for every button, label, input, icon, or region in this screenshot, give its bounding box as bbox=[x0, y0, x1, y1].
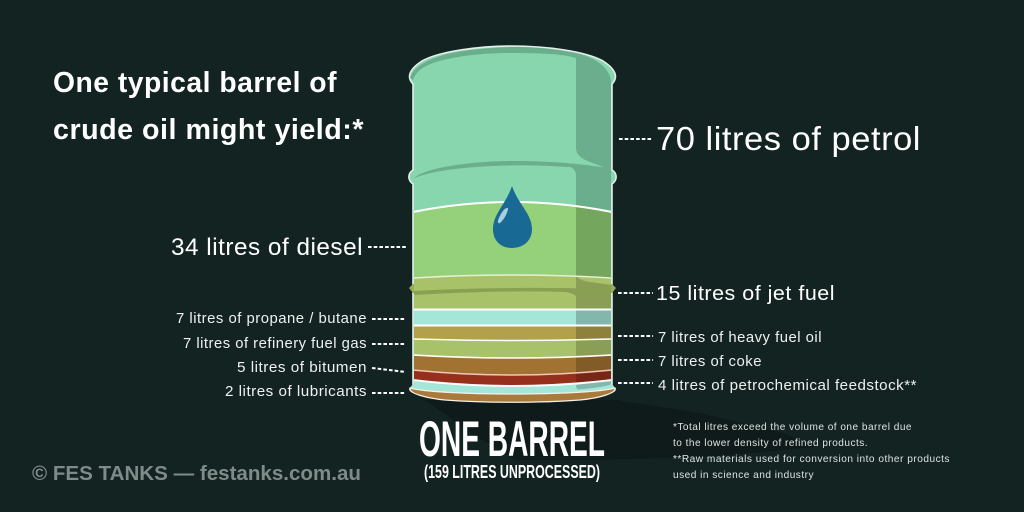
subheading: litres unprocessed: (159 LITRES UNPROCESSED) bbox=[424, 462, 600, 482]
barrel shell bbox=[409, 46, 616, 385]
layer: heavy fuel oil bbox=[413, 324, 612, 341]
title bbox=[53, 67, 364, 146]
layer: propane bbox=[413, 308, 612, 325]
label: diesel: 34 litres of diesel bbox=[171, 234, 363, 261]
icon: oil drop bbox=[493, 186, 532, 248]
footnotes: used in science and industry bbox=[673, 469, 814, 481]
label: lubricants: 2 litres of lubricants bbox=[225, 383, 367, 400]
layer: refinery fuel gas bbox=[413, 339, 612, 358]
layer: jet fuel bbox=[409, 275, 616, 310]
layer: coke bbox=[414, 354, 611, 374]
label: bitumen: 5 litres of bitumen bbox=[237, 359, 367, 376]
layer: lubricants bbox=[413, 380, 612, 392]
label: propane / butane: 7 litres of propane / butane bbox=[176, 310, 367, 327]
footnotes: *Total litres exceed the volume of one barrel due bbox=[673, 421, 912, 433]
layer: diesel bbox=[414, 201, 611, 278]
title: One typical barrel of bbox=[53, 67, 337, 99]
petrol shading bbox=[410, 47, 611, 212]
title: crude oil might yield:* bbox=[53, 114, 364, 146]
label: heavy fuel oil: 7 litres of heavy fuel oil bbox=[658, 329, 822, 346]
footnotes: to the lower density of refined products. bbox=[673, 437, 868, 449]
label: coke: 7 litres of coke bbox=[658, 353, 762, 370]
label: petrochemical feedstock: 4 litres of petrochemical feedstock** bbox=[658, 377, 917, 394]
label: refinery fuel gas: 7 litres of refinery fuel gas bbox=[183, 335, 367, 352]
credit: © FES TANKS — festanks.com.au bbox=[32, 463, 361, 485]
barrel bbox=[409, 46, 616, 402]
label: jet fuel: 15 litres of jet fuel bbox=[656, 282, 835, 305]
footnotes bbox=[673, 421, 950, 481]
heading: one barrel: ONE BARREL bbox=[419, 411, 605, 467]
footnotes: **Raw materials used for conversion into other products bbox=[673, 453, 950, 465]
layer: bitumen bbox=[413, 370, 612, 386]
barrel base rim bbox=[409, 384, 616, 402]
label: petrol: 70 litres of petrol bbox=[656, 120, 921, 157]
